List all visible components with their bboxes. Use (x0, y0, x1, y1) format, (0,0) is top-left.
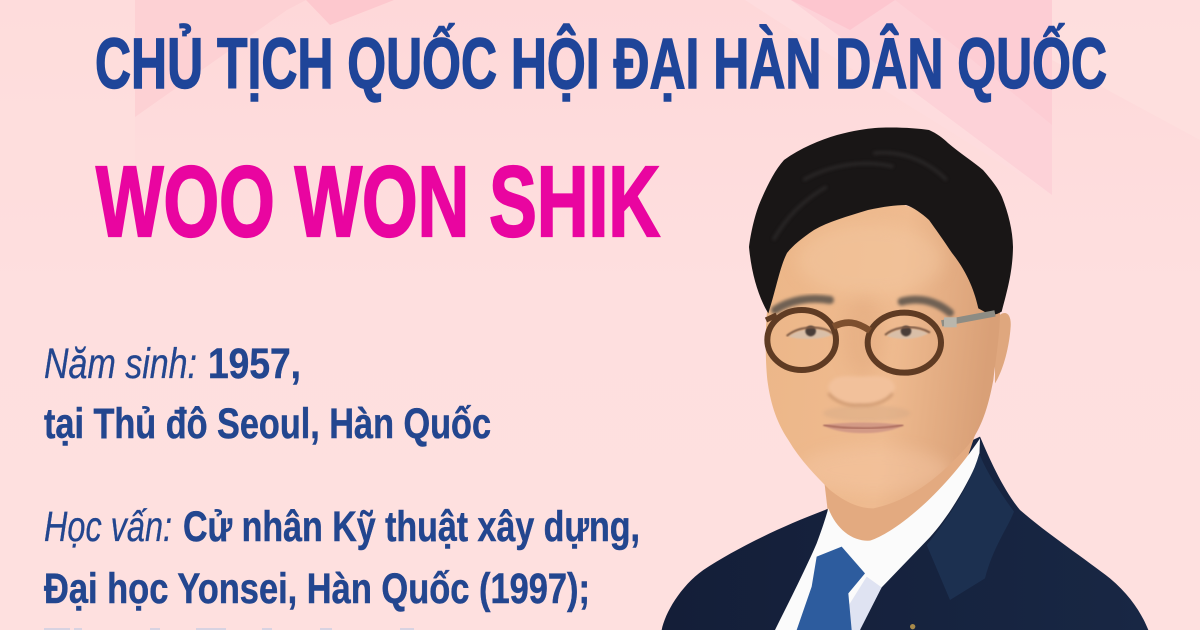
hair (749, 127, 1013, 315)
text block: birth: Năm sinh: (44, 340, 197, 388)
text block: education (44, 503, 640, 613)
mouth (823, 422, 903, 433)
text block: birth: 1957, (208, 340, 301, 388)
neck (823, 420, 980, 550)
nose (828, 376, 895, 405)
text block: education: Học vấn: (44, 503, 172, 551)
eyes (787, 326, 930, 339)
faint tops of the cropped next line (44, 628, 414, 630)
face (766, 200, 1000, 508)
name heading: WOO WON SHIK (96, 146, 660, 258)
tie (797, 547, 865, 630)
text block: education: Cử nhân Kỹ thuật xây dựng, (183, 503, 640, 551)
portrait (662, 128, 1148, 630)
glasses (766, 310, 995, 373)
shirt collar (775, 438, 980, 630)
pin (910, 624, 915, 629)
hair highlights (773, 153, 947, 240)
suit (662, 437, 1148, 630)
ear (995, 313, 1011, 383)
eyebrows (775, 299, 830, 310)
text block: birth (44, 340, 491, 448)
text block: birth: tại Thủ đô Seoul, Hàn Quốc (44, 400, 491, 448)
text block: education: Đại học Yonsei, Hàn Quốc (1997); (44, 565, 590, 613)
lapel (927, 453, 1014, 600)
